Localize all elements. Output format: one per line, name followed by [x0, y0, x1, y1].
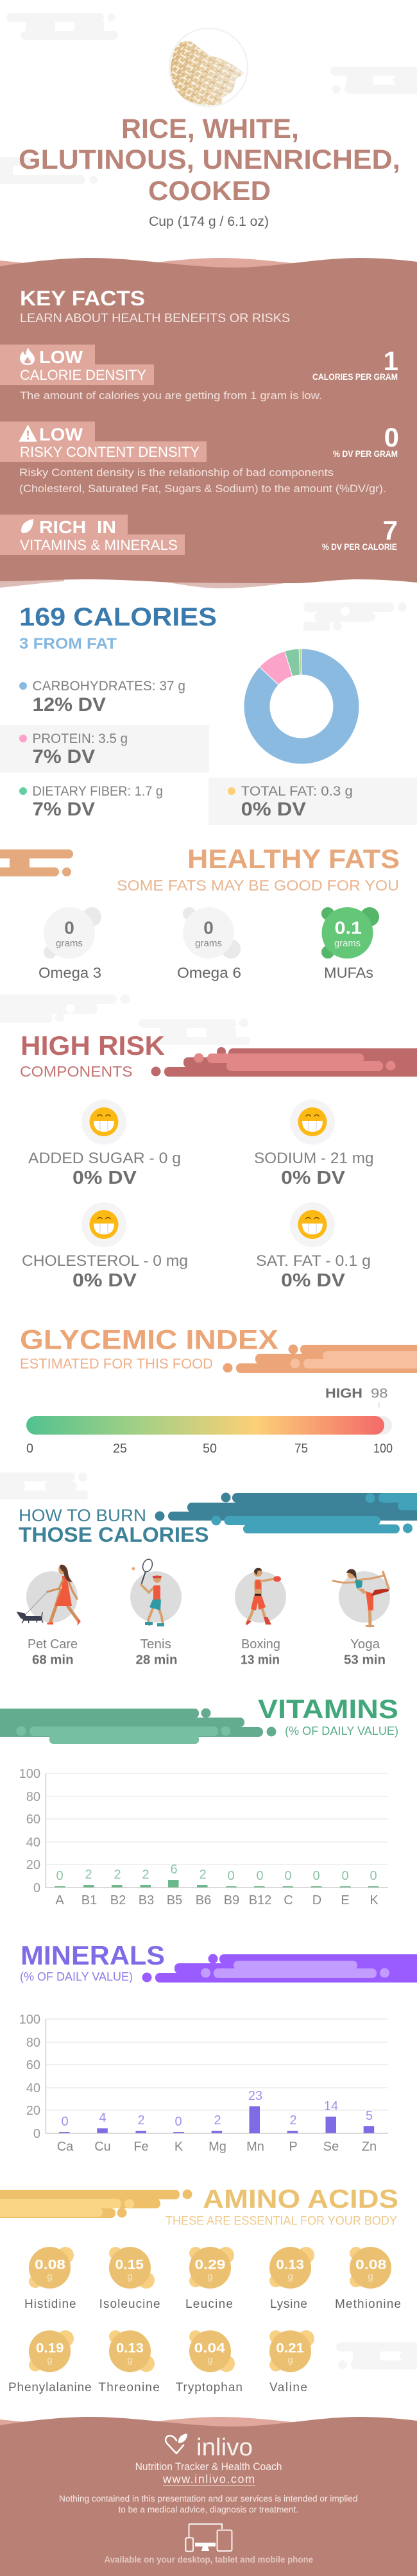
stat: dv per gram: % DV PER GRAM [333, 449, 398, 459]
tag: rich in vitamins and minerals [0, 515, 185, 555]
label: risky content density: RISKY CONTENT DENSITY [20, 444, 200, 460]
amino: threonine [98, 2330, 160, 2394]
amino: threonine: Threonine [98, 2381, 160, 2394]
heading: vitamins: VITAMINS [258, 1694, 398, 1724]
label: low: LOW [39, 425, 83, 444]
bubble: omega 6: grams [195, 939, 222, 949]
amino: threonine: 0.13 [116, 2341, 144, 2356]
bar chart: minerals: Zn [362, 2140, 377, 2154]
decoration: healthy fats bars [0, 849, 73, 876]
bar chart: minerals: 0 [33, 2127, 40, 2141]
legend: dietary fiber [19, 784, 163, 820]
activity: boxing: 13 min [241, 1653, 280, 1667]
risk item: cholesterol [22, 1202, 188, 1291]
bar chart: minerals: 20 [26, 2104, 40, 2118]
activity: pet care: 68 min [32, 1653, 73, 1667]
bar chart: minerals: Ca [57, 2140, 74, 2154]
bar chart: vitamins: B5 [167, 1893, 182, 1907]
subheading: healthy fats: SOME FATS MAY BE GOOD FOR YOU [117, 877, 399, 894]
risk item: added sugar [28, 1100, 181, 1188]
risk item: cholesterol: 0% DV [72, 1270, 137, 1291]
risk item: saturated fat: 0% DV [281, 1270, 346, 1291]
activity: pet care [17, 1564, 81, 1667]
subheading: from fat: 3 FROM FAT [19, 635, 117, 653]
risk item: saturated fat [256, 1202, 371, 1291]
legend: protein [0, 725, 209, 772]
icon: warning [19, 425, 37, 441]
amino: phenylalanine [8, 2330, 92, 2394]
bar chart: minerals: 2 [214, 2113, 221, 2128]
amino: tryptophan: Tryptophan [176, 2381, 243, 2394]
risk item: saturated fat: SAT. FAT - 0.1 g [256, 1252, 371, 1270]
legend: dietary fiber: DIETARY FIBER: 1.7 g [32, 784, 163, 799]
legend: total fat: 0% DV [241, 799, 306, 820]
disclaimer: Nothing contained in this presentation and our services is intended or implied [59, 2493, 358, 2503]
bar chart: vitamins: 2 [85, 1868, 92, 1882]
bar chart: minerals: 0 [174, 2115, 182, 2129]
bar chart: vitamins: B3 [139, 1893, 154, 1907]
amino: histidine [24, 2247, 76, 2311]
amino: tryptophan [176, 2330, 243, 2394]
gauge axis labels: 25 [113, 1442, 127, 1456]
risk item: sodium [254, 1100, 373, 1188]
bar chart: minerals: 2 [289, 2113, 297, 2128]
bar chart: minerals: P [289, 2140, 298, 2154]
text: calorie explanation: The amount of calories you are getting from 1 gram is low. [20, 389, 322, 402]
bar chart: minerals: 23 [248, 2089, 262, 2103]
heading: glycemic index: GLYCEMIC INDEX [20, 1324, 278, 1355]
bar chart: minerals: 14 [324, 2099, 338, 2113]
gauge axis labels: 75 [294, 1442, 308, 1456]
heading: amino acids: AMINO ACIDS [203, 2184, 398, 2213]
subheading: glycemic: ESTIMATED FOR THIS FOOD [20, 1356, 213, 1372]
tagline: Nutrition Tracker & Health Coach [135, 2461, 282, 2473]
bar chart: vitamins: K [370, 1893, 379, 1907]
bar chart: vitamins: 0 [227, 1869, 235, 1883]
glycemic gauge bar [26, 1416, 392, 1435]
label: vitamins and minerals: VITAMINS & MINERALS [20, 537, 178, 553]
bar chart: minerals: 2 [137, 2113, 145, 2128]
gauge axis labels: 50 [203, 1442, 217, 1456]
bar chart: minerals: Mg [208, 2140, 226, 2154]
bubble: omega 6: Omega 6 [177, 964, 241, 981]
subheading: amino acids: THESE ARE ESSENTIAL FOR YOUR BODY [166, 2215, 397, 2228]
legend: carbohydrates: 12% DV [32, 694, 106, 715]
decoration: grey cloud left [0, 994, 130, 1023]
subheading: minerals: (% OF DAILY VALUE) [20, 1970, 133, 1983]
bar chart: minerals: 4 [99, 2111, 106, 2125]
activity: boxing [235, 1568, 286, 1667]
bar chart: vitamins: 0 [33, 1881, 40, 1895]
heading: minerals: MINERALS [21, 1940, 165, 1970]
title [19, 114, 400, 207]
amino: tryptophan: 0.04 [194, 2341, 225, 2356]
decoration: vitamins bars [0, 1708, 276, 1744]
text: risky content explanation [19, 466, 386, 495]
amino: valine: Valine [269, 2381, 307, 2394]
legend: carbohydrates: CARBOHYDRATES: 37 g [32, 679, 185, 694]
stat: dv per calorie: 7 [383, 515, 398, 545]
bar chart: vitamins: 6 [170, 1863, 178, 1877]
serving size: Cup (174 g / 6.1 oz) [149, 214, 269, 229]
bar chart: minerals: 5 [366, 2109, 373, 2123]
bar chart: minerals: Mn [246, 2140, 264, 2154]
tag: low calorie density [0, 345, 154, 385]
icon: woman walking dog [17, 1564, 81, 1626]
bar chart: vitamins: B9 [224, 1893, 239, 1907]
stat: dv per calorie: % DV PER CALORIE [322, 542, 397, 552]
amino: histidine: Histidine [24, 2298, 76, 2311]
decoration: amino grey cloud [336, 2342, 417, 2369]
bar chart: minerals: Cu [94, 2140, 111, 2154]
glycemic value label: HIGH [325, 1386, 362, 1401]
bubble: omega 6: 0 [203, 917, 214, 938]
bar chart: vitamins: 80 [26, 1790, 40, 1804]
bar chart: vitamins: 0 [370, 1869, 377, 1883]
amino: isoleucine: g [127, 2271, 133, 2282]
activity: yoga [333, 1569, 390, 1667]
amino: leucine: 0.29 [195, 2257, 226, 2273]
bar chart: vitamins: 20 [26, 1858, 40, 1872]
text: risky content explanation: Risky Content density is the relationship of bad components [19, 466, 334, 479]
stat: calories per gram [312, 346, 398, 382]
heading: high risk: HIGH RISK [21, 1030, 165, 1061]
logo: inlivo: inlivo [196, 2434, 253, 2461]
amino: isoleucine [99, 2247, 160, 2311]
risk item: sodium: 0% DV [281, 1168, 346, 1188]
stat: dv per gram: 0 [384, 422, 399, 452]
amino: lysine: Lysine [270, 2298, 307, 2311]
stat: dv per gram [333, 422, 399, 459]
icon: flame [20, 348, 35, 365]
bar chart: minerals: K [174, 2140, 183, 2154]
bar chart: minerals [19, 2013, 388, 2154]
label: rich in: RICH IN [39, 517, 116, 537]
legend: carbohydrates [19, 679, 185, 715]
bar chart: vitamins: 100 [19, 1767, 40, 1781]
subheading: vitamins: (% OF DAILY VALUE) [285, 1725, 398, 1737]
donut chart: macronutrients [244, 649, 359, 764]
amino: methionine: Methionine [335, 2298, 401, 2311]
heading: healthy fats: HEALTHY FATS [187, 844, 400, 874]
risk item: cholesterol: CHOLESTEROL - 0 mg [22, 1252, 188, 1270]
decoration: high risk bars [151, 1047, 417, 1077]
decoration: glycemic bars [223, 1345, 417, 1373]
bubble: omega 3: grams [56, 939, 83, 949]
amino: phenylalanine: Phenylalanine [8, 2381, 92, 2394]
bubble: mufas: MUFAs [324, 964, 373, 981]
amino: phenylalanine: 0.19 [36, 2341, 64, 2356]
legend: protein: PROTEIN: 3.5 g [32, 731, 128, 746]
icon: devices [186, 2524, 232, 2551]
heading: key facts: KEY FACTS [20, 287, 145, 310]
activity: tennis: 28 min [136, 1653, 177, 1667]
bubble: mufas [321, 907, 379, 981]
bubble: omega 3: 0 [64, 917, 74, 938]
title: COOKED [148, 176, 271, 207]
amino: histidine: 0.08 [35, 2257, 65, 2273]
bar chart: minerals: 40 [26, 2081, 40, 2095]
bar chart: vitamins: 0 [341, 1869, 349, 1883]
title: RICE, WHITE, [121, 114, 299, 144]
bar chart: vitamins: C [284, 1893, 293, 1907]
activity: pet care: Pet Care [28, 1637, 78, 1651]
gauge axis labels: 100 [373, 1442, 393, 1456]
bubble: omega 3: Omega 3 [38, 964, 101, 981]
amino: leucine [185, 2247, 234, 2311]
bar chart: minerals: 100 [19, 2013, 40, 2027]
bubble: mufas: grams [334, 939, 361, 949]
glycemic value label [325, 1386, 387, 1408]
amino: tryptophan: g [207, 2355, 213, 2366]
bar chart: vitamins: 0 [284, 1869, 292, 1883]
amino: lysine: g [287, 2271, 293, 2282]
bar chart: vitamins: 0 [56, 1869, 64, 1883]
heading: calories: 169 CALORIES [19, 603, 217, 631]
bar chart: minerals: Fe [133, 2140, 149, 2154]
decoration: teal bars [155, 1492, 417, 1533]
bubble: omega 6 [177, 907, 241, 981]
amino: valine: 0.21 [276, 2341, 304, 2356]
glycemic value label: 98 [371, 1386, 387, 1401]
bar chart: vitamins: 40 [26, 1836, 40, 1850]
stat: calories per gram: CALORIES PER GRAM [312, 372, 398, 382]
icon: leaf [21, 519, 33, 533]
activity: tennis: Tenis [140, 1637, 171, 1651]
bar chart: vitamins: B12 [249, 1893, 271, 1907]
decoration: minerals bars [142, 1954, 417, 1983]
bar chart: minerals: 60 [26, 2058, 40, 2072]
calories decoration cloud [303, 602, 407, 631]
risk item: added sugar: 0% DV [72, 1168, 137, 1188]
title: GLUTINOUS, UNENRICHED, [19, 144, 400, 175]
bar chart: vitamins: B6 [196, 1893, 211, 1907]
subheading: components: COMPONENTS [20, 1063, 132, 1080]
gauge axis labels [26, 1442, 393, 1456]
risk item: added sugar: ADDED SUGAR - 0 g [28, 1150, 181, 1167]
subheading: LEARN ABOUT HEALTH BENEFITS OR RISKS [20, 312, 290, 325]
amino: isoleucine: Isoleucine [99, 2298, 160, 2311]
label: low: LOW [39, 347, 83, 367]
bar chart: minerals: Se [323, 2140, 339, 2154]
panel: footer [0, 2417, 417, 2576]
bar chart: vitamins: 2 [199, 1868, 207, 1882]
website link: www.inlivo.com [162, 2473, 255, 2486]
activity: yoga: Yoga [350, 1637, 380, 1651]
decoration: grey cloud burn [0, 1472, 89, 1499]
text: risky content explanation: (Cholesterol, Saturated Fat, Sugars & Sodium) to the amount (%DV/gr). [19, 482, 386, 495]
amino: lysine: 0.13 [276, 2257, 304, 2273]
bar chart: vitamins: 2 [142, 1868, 149, 1882]
bar chart: vitamins: E [341, 1893, 350, 1907]
bar chart: minerals: 80 [26, 2036, 40, 2050]
legend: dietary fiber: 7% DV [32, 799, 95, 820]
stat: dv per calorie [322, 515, 398, 552]
bar chart: vitamins: A [55, 1893, 64, 1907]
heading: those calories: THOSE CALORIES [19, 1523, 209, 1546]
legend: protein: 7% DV [32, 746, 95, 767]
activity: tennis [130, 1558, 182, 1667]
tag: low risky content density [0, 422, 207, 462]
heading: how to burn: HOW TO BURN [19, 1506, 146, 1525]
bar chart: vitamins: 0 [256, 1869, 264, 1883]
legend: total fat: TOTAL FAT: 0.3 g [241, 784, 353, 799]
logo: inlivo [166, 2434, 253, 2461]
bar chart: vitamins: 2 [114, 1868, 121, 1882]
amino: leucine: g [207, 2271, 213, 2282]
amino: valine [269, 2330, 314, 2394]
bar chart: minerals: 0 [61, 2115, 69, 2129]
food image: rice in circle [169, 28, 248, 107]
amino: lysine [269, 2247, 314, 2311]
amino: valine: g [287, 2355, 293, 2366]
legend: total fat [208, 778, 417, 825]
amino: isoleucine: 0.15 [115, 2257, 144, 2273]
bubble: mufas: 0.1 [335, 917, 362, 938]
activity: yoga: 53 min [344, 1653, 386, 1667]
bar chart: vitamins: D [312, 1893, 321, 1907]
amino: methionine: 0.08 [355, 2257, 387, 2273]
icon: boxer [246, 1568, 281, 1625]
bar chart: vitamins: 60 [26, 1813, 40, 1827]
amino: histidine: g [47, 2271, 53, 2282]
icon: tennis player [132, 1558, 164, 1626]
header decoration: left cloud [0, 157, 98, 184]
bar chart: vitamins: 0 [312, 1869, 320, 1883]
panel: key facts [0, 258, 417, 588]
disclaimer: to be a medical advice, diagnosis or treatment. [118, 2504, 298, 2514]
header decoration: top-left cloud [6, 13, 118, 40]
amino: methionine [335, 2247, 401, 2311]
amino: methionine: g [368, 2271, 373, 2282]
header decoration: right cloud [330, 67, 417, 94]
label: calorie density: CALORIE DENSITY [20, 367, 146, 383]
bar chart: vitamins: B2 [110, 1893, 126, 1907]
disclaimer [59, 2493, 358, 2514]
icon: yoga pose [333, 1569, 389, 1627]
risk item: sodium: SODIUM - 21 mg [254, 1150, 373, 1167]
decoration: amino acid bars [0, 2189, 192, 2218]
amino: leucine: Leucine [185, 2298, 233, 2311]
bubble: omega 3 [38, 907, 101, 981]
gauge axis labels: 0 [26, 1442, 33, 1456]
bar chart: vitamins [19, 1767, 388, 1907]
bar chart: vitamins: B1 [81, 1893, 97, 1907]
activity: boxing: Boxing [241, 1637, 280, 1651]
decoration: grey cloud centre [139, 1018, 250, 1045]
amino: phenylalanine: g [47, 2355, 53, 2366]
amino: threonine: g [127, 2355, 133, 2366]
stat: calories per gram: 1 [384, 346, 398, 376]
availability note: Available on your desktop, tablet and mobile phone [104, 2555, 313, 2564]
